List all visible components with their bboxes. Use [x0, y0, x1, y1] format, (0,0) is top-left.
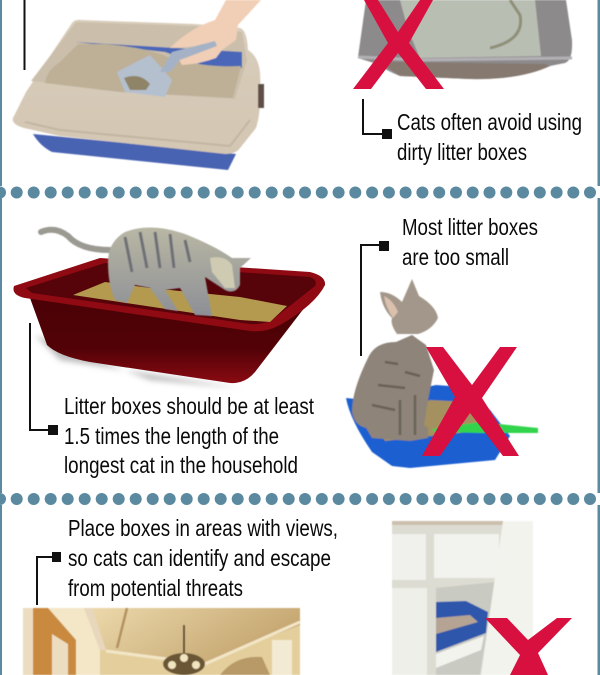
illustration: dirty litter box — [358, 0, 572, 79]
caption: views: Place boxes in areas with views, — [68, 515, 338, 541]
cat — [41, 227, 251, 316]
illustration: large red litter box with cat — [13, 227, 325, 388]
illustration: clean litter box with scoop and hand — [13, 0, 264, 170]
lid front shading — [25, 120, 250, 146]
box body — [30, 298, 308, 383]
inner — [26, 263, 316, 324]
caption: too small: are too small — [402, 244, 509, 270]
chandelier — [183, 625, 185, 653]
caption: views: so cats can identify and escape — [68, 545, 331, 571]
caption: dirty boxes — [397, 109, 582, 165]
caption: views: from potential threats — [68, 575, 243, 601]
beige lid — [13, 20, 260, 154]
pale corner ceiling — [48, 608, 100, 675]
arch — [220, 657, 270, 675]
hand — [170, 0, 261, 65]
caption: views — [68, 515, 338, 601]
kitten head — [380, 279, 438, 334]
red X: dirty box — [353, 0, 444, 89]
caption: too small: Most litter boxes — [402, 214, 538, 240]
connector line: clean box — [24, 0, 26, 70]
litter — [73, 282, 287, 322]
photo: litter box hidden in white cabinet — [392, 521, 533, 675]
right border — [598, 0, 600, 675]
left border — [0, 0, 2, 675]
kitten body — [352, 335, 434, 441]
caption: dirty boxes: dirty litter boxes — [397, 139, 527, 165]
shadow — [35, 335, 240, 388]
litter — [45, 44, 241, 98]
red X: hidden box — [485, 618, 572, 675]
dotted divider 2 — [0, 493, 596, 505]
caption: box size: 1.5 times the length of the — [64, 423, 279, 449]
scoop — [117, 55, 172, 97]
caption: box size — [64, 393, 314, 478]
connector: views caption — [36, 552, 61, 605]
blue box — [346, 385, 510, 468]
window wall — [23, 608, 76, 675]
photo: bright room with chandelier — [23, 608, 300, 675]
ceiling — [88, 608, 300, 662]
caption: box size: Litter boxes should be at least — [64, 393, 314, 419]
blue liner — [75, 42, 242, 68]
caption: too small — [402, 214, 538, 270]
connector: red box caption — [29, 323, 58, 435]
red X: small box — [422, 347, 519, 456]
crown moulding — [84, 608, 106, 650]
connector: dirty box caption — [362, 99, 392, 139]
dotted divider 1 — [0, 186, 596, 198]
opening: back and side walls — [31, 22, 247, 99]
connector: too small caption — [360, 241, 389, 356]
illustration: kitten in small blue box — [346, 279, 538, 468]
rim — [13, 258, 325, 331]
caption: box size: longest cat in the household — [64, 452, 298, 478]
blue base — [33, 134, 236, 170]
